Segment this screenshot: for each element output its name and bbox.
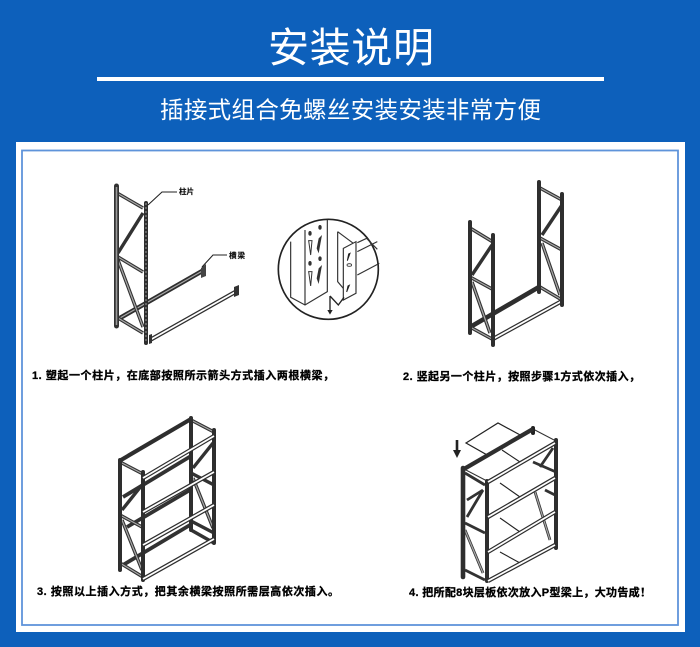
title underline [97,77,604,81]
leader: beam [202,255,227,267]
step 4 diagram: rack with shelf boards [453,423,556,581]
shelf board being placed [466,423,522,456]
title: 安装说明 [268,25,434,71]
upright frame [116,186,146,343]
step 3 diagram: assembled rack [120,418,214,580]
step 2 diagram: two uprights with beams [470,182,562,345]
label: upright: 柱片 [179,186,194,196]
step 1 caption: 1. 塑起一个柱片，在底部按照所示箭头方式插入两根横梁， [32,368,334,382]
subtitle: 插接式组合免螺丝安装安装非常方便 [160,97,541,123]
step 2 caption: 2. 竖起另一个柱片，按照步骤1方式依次插入， [403,369,640,383]
step 1 diagram: upright frame and beams [116,186,246,344]
leader: upright [148,192,177,205]
arrow: down [453,440,461,458]
beam rear [120,264,206,318]
panel: instructions [16,142,685,632]
step 4 caption: 4. 把所配8块层板依次放入P型梁上，大功告成！ [409,585,651,599]
step 3 caption: 3. 按照以上插入方式，把其余横梁按照所需层高依次插入。 [37,584,339,598]
icon: magnified hook connector [278,219,379,319]
label: beam: 横梁 [229,250,246,260]
beam front [149,285,239,344]
top shelf board [464,429,556,481]
